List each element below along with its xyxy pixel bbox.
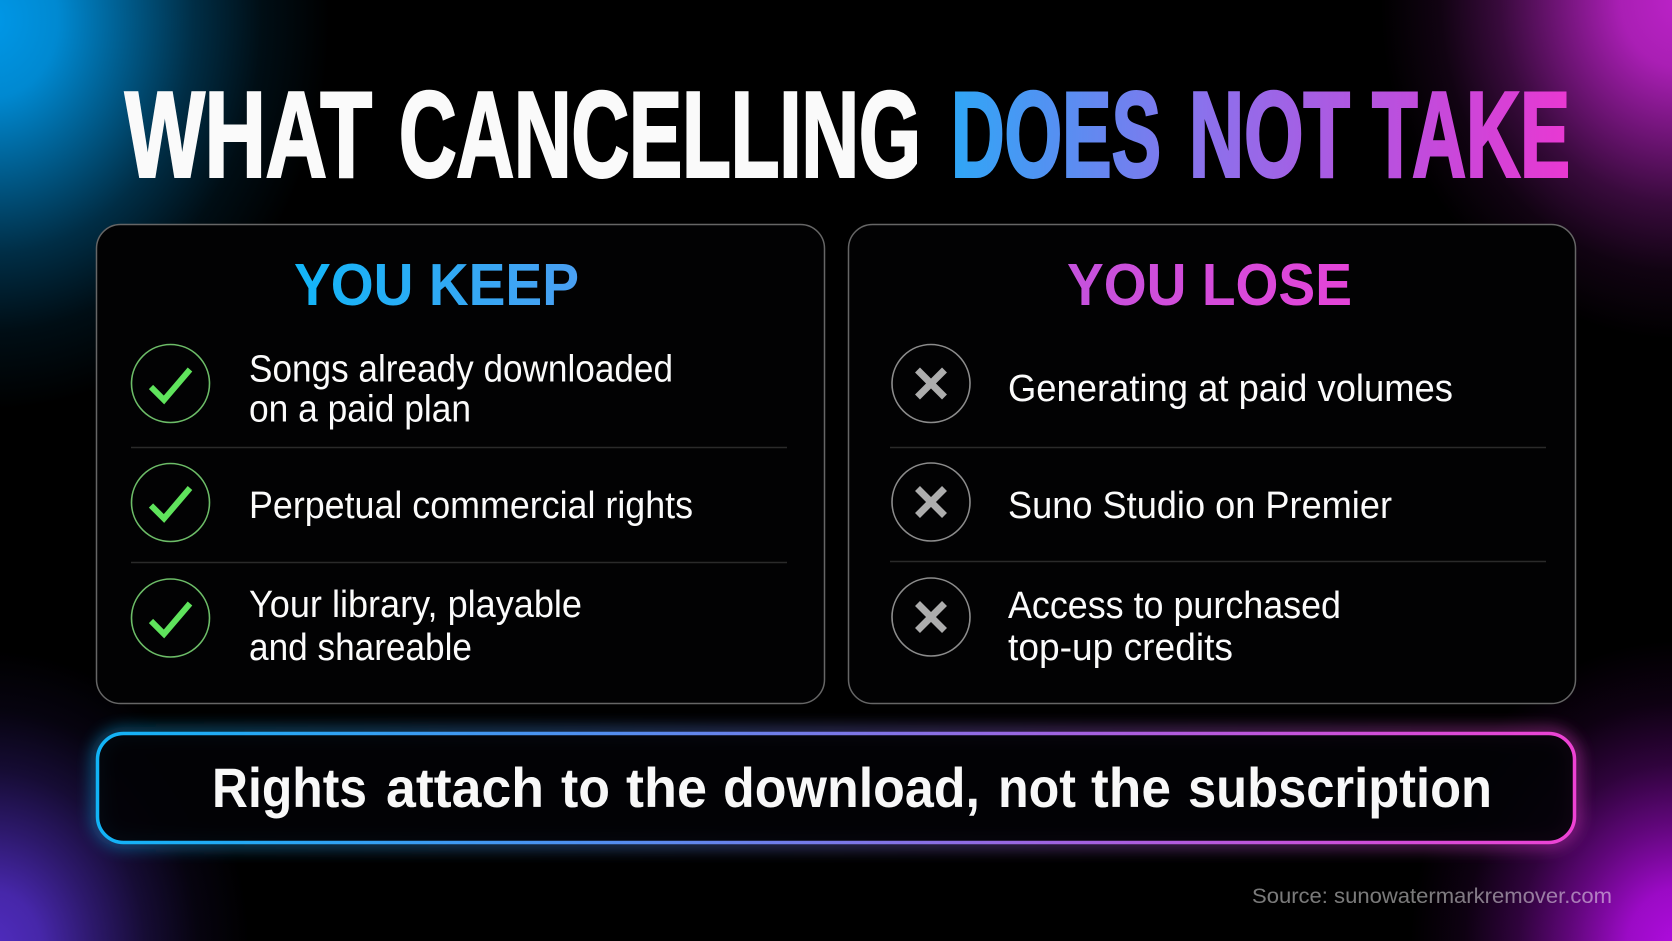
callout: rights attach: subscription [1188, 756, 1492, 819]
item: your library: Your library, playable [249, 584, 582, 626]
title: WHAT [125, 66, 372, 202]
source note: Source: sunowatermarkremover.com [1252, 885, 1612, 908]
callout: rights attach: Rights [212, 756, 367, 819]
item: suno studio on premier [892, 463, 1392, 541]
callout: rights attach: attach [386, 756, 544, 819]
item: access to purchased top-up credits: Access to purchased [1008, 585, 1341, 627]
panel: you lose [848, 224, 1576, 704]
item: perpetual commercial rights [132, 464, 693, 542]
callout: rights attach: the [1091, 756, 1171, 819]
title: DOES [951, 66, 1161, 202]
callout: rights attach: download, [723, 756, 980, 819]
callout: rights attach: to [561, 756, 610, 819]
item: generating at paid volumes: Generating at paid volumes [1008, 368, 1453, 410]
item: songs already downloaded: on a paid plan [249, 388, 471, 430]
item: generating at paid volumes [892, 344, 1453, 422]
item: perpetual commercial rights: Perpetual commercial rights [249, 485, 693, 527]
item: songs already downloaded: Songs already downloaded [249, 348, 673, 390]
title: CANCELLING [399, 66, 921, 202]
item: suno studio on premier: Suno Studio on Premier [1008, 485, 1392, 527]
title [125, 66, 1570, 202]
callout: rights attach [98, 734, 1574, 842]
item: your library: and shareable [249, 627, 472, 669]
heading: you keep: YOU KEEP [294, 252, 579, 318]
item: access to purchased top-up credits [892, 578, 1341, 669]
panel: you keep [96, 224, 824, 704]
item: your library [132, 579, 582, 669]
heading: you lose: YOU LOSE [1067, 252, 1352, 318]
item: songs already downloaded [132, 344, 673, 430]
callout: rights attach: not [998, 756, 1076, 819]
item: access to purchased top-up credits: top-up credits [1008, 627, 1233, 669]
callout: rights attach: the [626, 756, 707, 819]
title: NOT [1189, 66, 1350, 202]
